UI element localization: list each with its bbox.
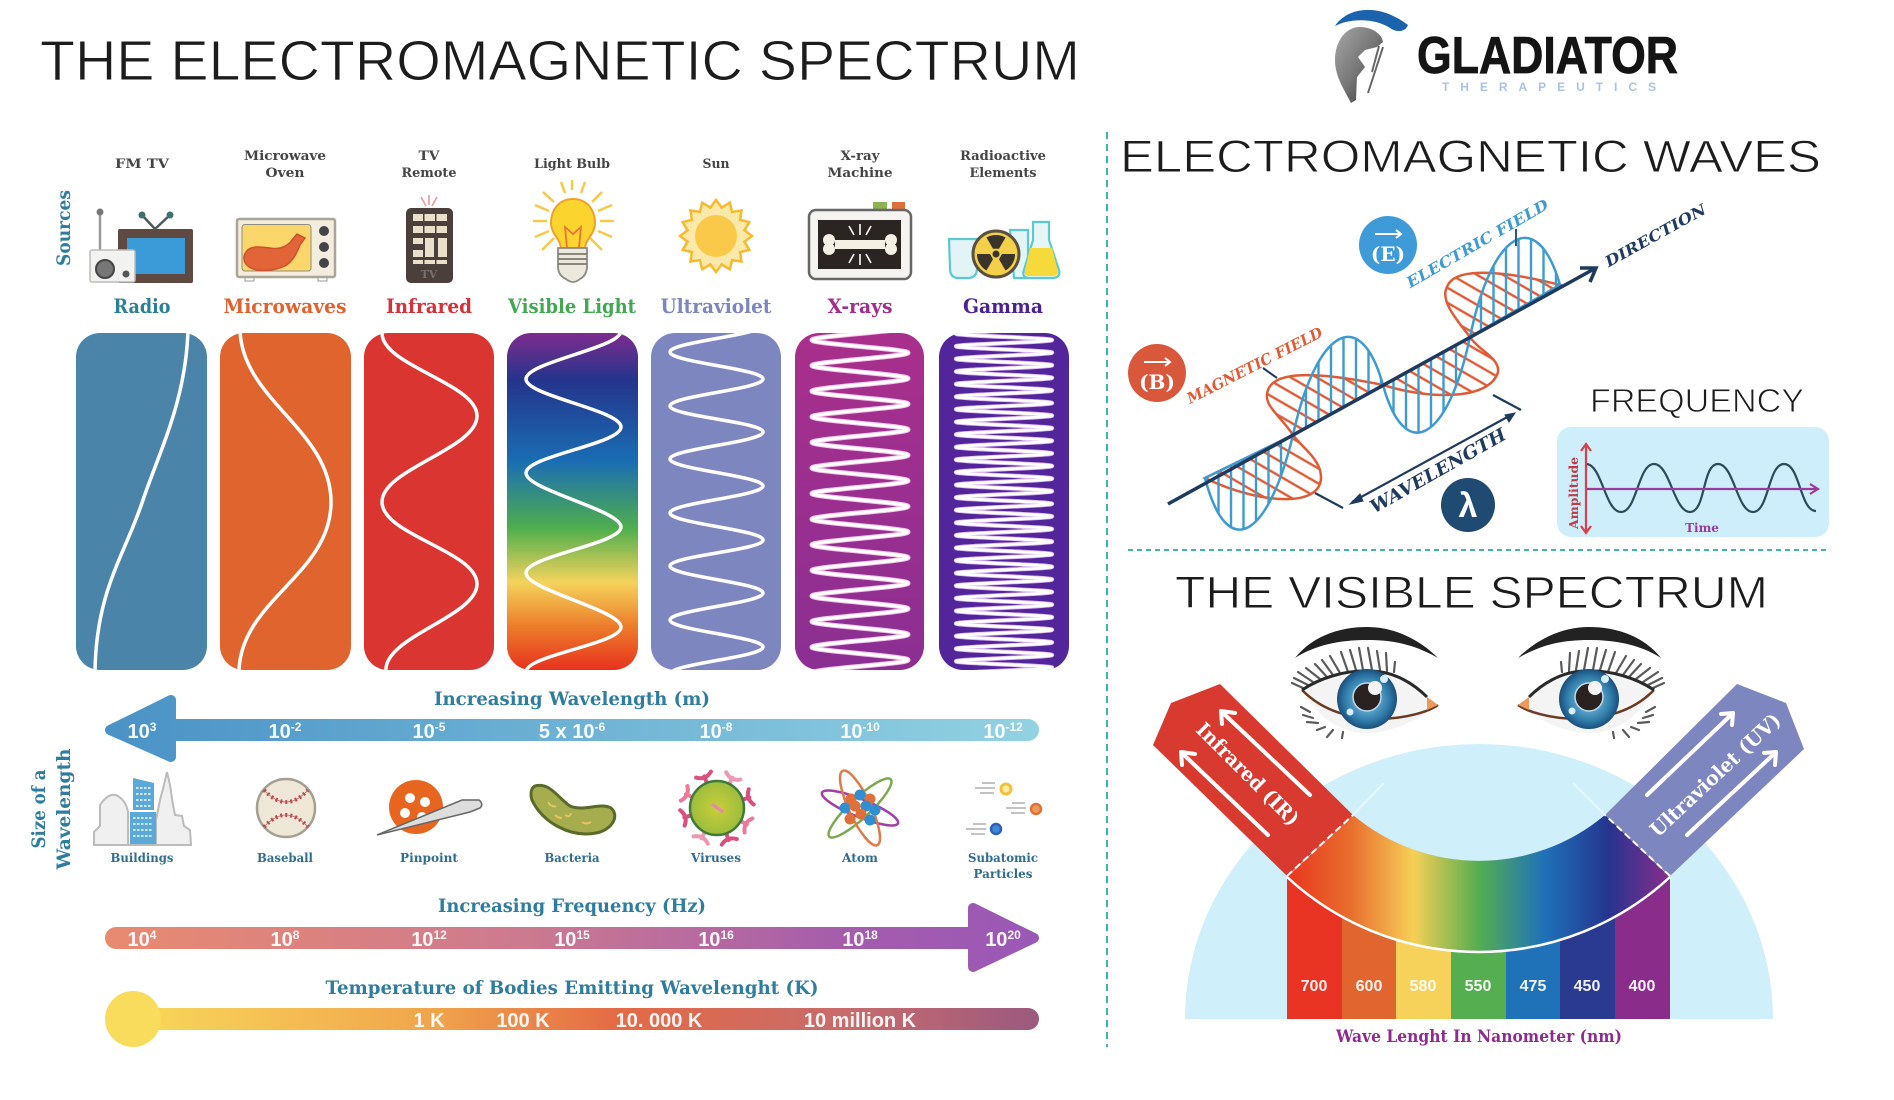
icon: microwave oven — [237, 219, 335, 281]
icon: right eye — [1518, 627, 1664, 738]
frequency values: 10 — [128, 929, 150, 951]
icon: sun — [680, 200, 752, 272]
icon: virus — [680, 772, 754, 845]
spectrum names: Radio — [114, 294, 170, 318]
icon: pinpoint — [377, 780, 482, 835]
heading: electromagnetic waves: ELECTROMAGNETIC WAVES — [1120, 131, 1821, 182]
arrow: frequency bar — [105, 908, 1034, 967]
wave column: radio — [76, 330, 207, 672]
icon: buildings — [94, 772, 191, 845]
spectrum names — [114, 294, 1043, 318]
label: size of a wavelength: Size of a — [29, 770, 50, 848]
wave column: microwaves — [220, 330, 351, 672]
panel: electromagnetic waves — [1120, 131, 1829, 537]
icon: atom — [819, 766, 901, 850]
wavelength values: 10 — [840, 721, 862, 743]
wavelength values in nanometers: 550 — [1465, 978, 1491, 995]
spectrum names: X-rays — [828, 294, 892, 318]
wavelength values: 3 — [150, 720, 157, 734]
label: size of a wavelength — [29, 748, 75, 871]
icon: magnetic field badge — [1128, 344, 1186, 402]
frequency values: 10 — [271, 929, 293, 951]
panel: the visible spectrum — [1153, 567, 1804, 1047]
spectrum names: Ultraviolet — [660, 294, 772, 318]
logo tagline: THERAPEUTICS — [1442, 80, 1656, 94]
icon: electric field badge — [1359, 216, 1417, 274]
logo: Gladiator Therapeutics — [1335, 10, 1678, 103]
source labels: TV — [418, 149, 440, 164]
wavelength values: 10 — [128, 721, 150, 743]
wave column: ultraviolet — [651, 325, 781, 674]
wavelength values in nanometers — [1301, 978, 1655, 995]
wavelength values: -12 — [1005, 720, 1023, 734]
temperature values: 100 K — [496, 1010, 550, 1032]
arrow: infrared — [1153, 684, 1353, 876]
chart: frequency wave panel: Amplitude — [1567, 457, 1581, 530]
source labels: Remote — [402, 166, 456, 181]
wavelength values: -5 — [435, 720, 446, 734]
icon: radioactive elements — [949, 222, 1059, 278]
frequency values: 10 — [698, 929, 720, 951]
wavelength values: 10 — [413, 721, 435, 743]
heading: increasing frequency: Increasing Frequency (Hz) — [438, 896, 706, 917]
wavelength values: 10 — [983, 721, 1005, 743]
arrow: infrared: Infrared (IR) — [1191, 717, 1305, 831]
arrow: ultraviolet: Ultraviolet (UV) — [1645, 708, 1786, 842]
frequency values: 8 — [293, 928, 300, 942]
icon: baseball — [257, 779, 315, 837]
panel: spectrum sources and waves — [54, 149, 1069, 674]
spectrum names: Visible Light — [507, 294, 637, 318]
source labels: Oven — [266, 166, 305, 181]
wave column: infrared — [364, 333, 494, 672]
wavelength values: -2 — [291, 720, 302, 734]
icon: left eye — [1292, 627, 1438, 738]
frequency values: 20 — [1007, 928, 1021, 942]
spectrum names: Gamma — [963, 294, 1043, 318]
size labels — [110, 850, 1038, 881]
frequency values: 15 — [576, 928, 590, 942]
size labels: Baseball — [257, 850, 313, 865]
wave column: gamma — [939, 327, 1069, 674]
wavelength values: 5 x 10 — [539, 721, 594, 743]
wavelength values in nanometers: 580 — [1410, 978, 1436, 995]
wavelength values: -8 — [722, 720, 733, 734]
icon: lambda badge — [1441, 478, 1495, 532]
icon: electric field badge: (E) — [1371, 242, 1405, 266]
logo wordmark: GLADIATOR — [1417, 27, 1678, 85]
source labels: Light Bulb — [534, 157, 610, 172]
wave column: x-rays — [795, 327, 924, 673]
source labels: X-ray — [840, 149, 880, 164]
temperature values: 1 K — [413, 1010, 445, 1032]
icon: light bulb — [533, 180, 614, 282]
frequency values: 10 — [411, 929, 433, 951]
wavelength values in nanometers: 600 — [1356, 978, 1382, 995]
icon: TV remote: TV — [421, 268, 438, 281]
icon: magnetic field badge: (B) — [1139, 370, 1175, 394]
size labels: Pinpoint — [400, 850, 458, 865]
source labels — [115, 149, 1046, 181]
wavelength values — [128, 720, 1023, 743]
heading: the visible spectrum: THE VISIBLE SPECTRUM — [1175, 567, 1768, 618]
source labels: FM TV — [115, 157, 170, 172]
wavelength values: 10 — [700, 721, 722, 743]
icon: x-ray machine — [809, 202, 911, 279]
label: electric field: ELECTRIC FIELD — [1402, 196, 1552, 292]
label: magnetic field: MAGNETIC FIELD — [1183, 323, 1326, 408]
arrow: wavelength bar — [110, 700, 1039, 757]
label: wavelength: WAVELENGTH — [1367, 424, 1511, 518]
spectrum names: Microwaves — [224, 294, 346, 318]
frequency values: 10 — [985, 929, 1007, 951]
wavelength values in nanometers: 700 — [1301, 978, 1327, 995]
icon: radio and TV — [90, 208, 193, 283]
heading: increasing wavelength: Increasing Wavelength (m) — [434, 689, 710, 710]
chart: frequency wave panel: Time — [1685, 521, 1719, 535]
source labels: Machine — [828, 166, 892, 181]
title: THE ELECTROMAGNETIC SPECTRUM — [40, 29, 1080, 93]
frequency values: 10 — [554, 929, 576, 951]
wavelength values in nanometers: 450 — [1574, 978, 1600, 995]
chart: electric field lobes — [1205, 238, 1560, 530]
wave column: visible light — [507, 331, 638, 672]
temperature bar — [105, 991, 1039, 1047]
wavelength values: -10 — [862, 720, 880, 734]
arrow: direction axis — [1168, 268, 1596, 504]
frequency values: 10 — [842, 929, 864, 951]
size labels: Bacteria — [544, 850, 600, 865]
heading: temperature: Temperature of Bodies Emitting Wavelenght (K) — [326, 978, 818, 999]
temperature values: 10. 000 K — [616, 1010, 703, 1032]
icon: gladiator helmet — [1335, 10, 1408, 103]
label: direction: DIRECTION — [1601, 200, 1711, 271]
size labels: Buildings — [110, 850, 174, 865]
size labels: Viruses — [690, 850, 741, 865]
wavelength values in nanometers: 400 — [1629, 978, 1655, 995]
arrow: ultraviolet — [1605, 684, 1804, 876]
icon: lambda badge: λ — [1459, 487, 1478, 525]
chart: wavelength columns — [1287, 877, 1670, 1019]
temperature values: 10 million K — [804, 1010, 917, 1032]
temperature values — [413, 1010, 917, 1032]
size labels: Particles — [974, 866, 1032, 881]
chart: frequency wave panel — [1557, 427, 1829, 537]
caption: wavelength in nanometers: Wave Lenght In Nanometer (nm) — [1335, 1027, 1622, 1047]
source labels: Radioactive — [960, 149, 1046, 164]
frequency values: 12 — [433, 928, 447, 942]
size labels: Atom — [841, 850, 878, 865]
source labels: Microwave — [244, 149, 326, 164]
dome background — [1185, 744, 1773, 1019]
icon: bacteria — [531, 785, 615, 834]
source labels: Elements — [970, 166, 1036, 181]
icon: TV remote — [406, 195, 453, 283]
arrow: wavelength span — [1315, 395, 1521, 508]
panel: scale bars and wavelength sizes — [29, 689, 1041, 1047]
frequency values: 4 — [150, 928, 157, 942]
label: size of a wavelength: Wavelength — [54, 748, 75, 871]
frequency values — [128, 928, 1021, 951]
wavelength values: -6 — [594, 720, 605, 734]
chart: magnetic field lobes — [1205, 273, 1560, 499]
size labels: Subatomic — [968, 850, 1038, 865]
frequency values: 16 — [720, 928, 734, 942]
wavelength values: 10 — [269, 721, 291, 743]
chart: spectrum band — [1287, 815, 1670, 952]
wavelength values in nanometers: 475 — [1520, 978, 1546, 995]
spectrum names: Infrared — [386, 294, 472, 318]
heading: frequency: FREQUENCY — [1590, 382, 1804, 419]
frequency values: 18 — [864, 928, 878, 942]
icon: subatomic particles — [966, 783, 1041, 834]
label: sources axis: Sources — [54, 190, 75, 266]
source labels: Sun — [702, 157, 730, 172]
